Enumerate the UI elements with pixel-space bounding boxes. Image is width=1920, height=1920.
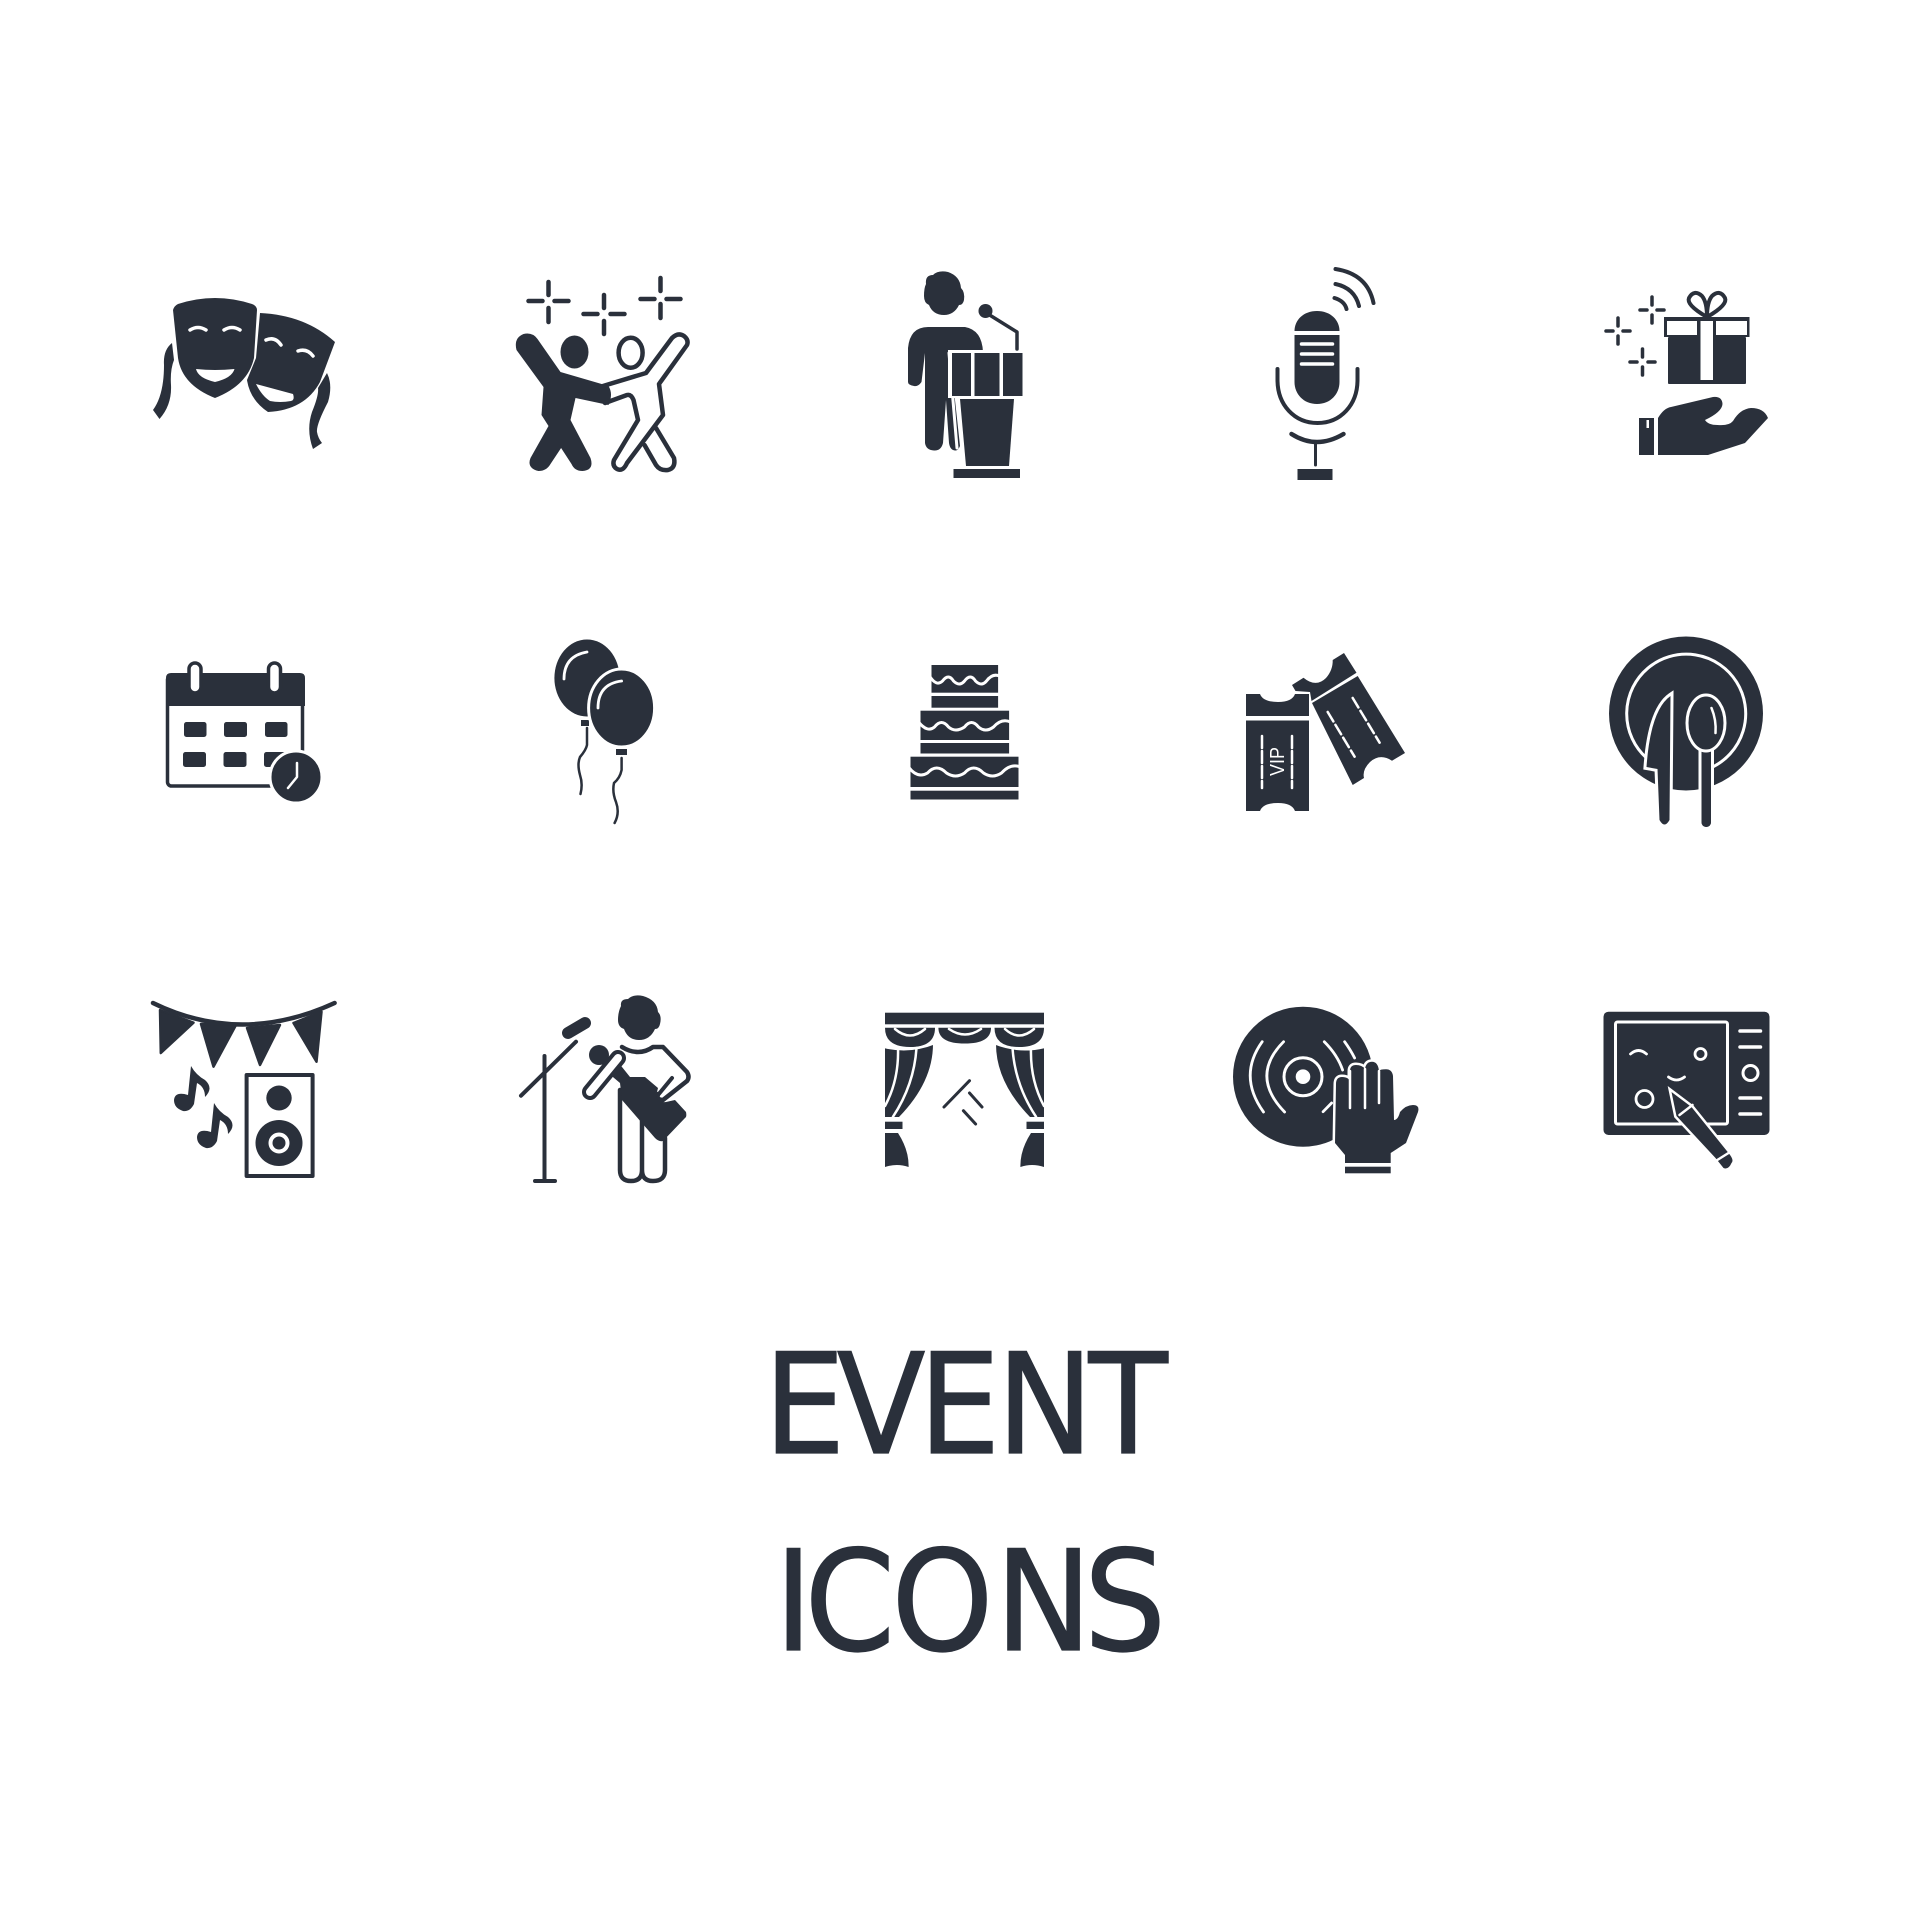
- icon: layered cake: [908, 665, 1020, 800]
- icon: podcast microphone: [1278, 269, 1374, 480]
- title: ICONS: [774, 1521, 1166, 1683]
- icon: gift on hand: [1606, 293, 1768, 455]
- title: EVENT: [764, 1324, 1169, 1486]
- icon: DJ hand on vinyl: [1233, 1007, 1418, 1173]
- icon: calendar with clock: [166, 663, 322, 803]
- icon: plate with knife and spoon: [1609, 636, 1763, 827]
- title: [764, 1324, 1169, 1683]
- icon: VIP tickets: [1246, 653, 1405, 811]
- icon: singer with guitar and mic stand: [521, 995, 688, 1181]
- icon: stage curtains: [885, 1013, 1044, 1167]
- text: VIP: VIP: [1267, 747, 1289, 776]
- icon: balloons: [554, 640, 655, 823]
- icon: speaker at podium: [908, 271, 1025, 478]
- icon: drawing tablet with pen: [1604, 1012, 1770, 1168]
- icon: party bunting with music speaker: [153, 1003, 335, 1176]
- icon: dancing couple: [516, 278, 688, 471]
- icon: theatre masks: [153, 298, 335, 449]
